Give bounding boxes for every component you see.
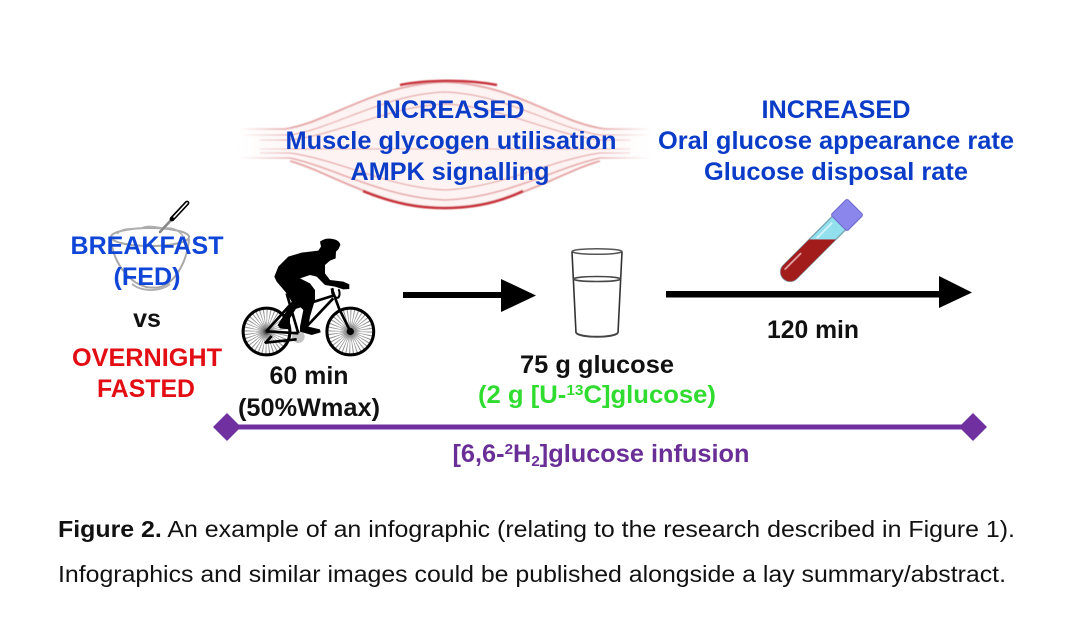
text: overnight fasted: OVERNIGHT (72, 344, 222, 372)
icon: cereal bowl (111, 203, 189, 290)
icon: blood test tube (775, 199, 863, 287)
text: overnight fasted (72, 344, 222, 403)
text: breakfast fed: BREAKFAST (70, 232, 224, 260)
text: infusion label: [6,6- (452, 440, 504, 468)
caption: Figure 2. An example of an infographic (relating to the research described in Figure 1). (58, 516, 1015, 542)
chainring (292, 330, 305, 343)
text: overnight fasted: FASTED (97, 375, 195, 403)
caption: Infographics and similar images could be published alongside a lay summary/abstract. (58, 561, 1006, 587)
rider silhouette (274, 239, 349, 335)
text: 120 min: 120 min (767, 316, 859, 344)
text: glucose dose: 75 g glucose (520, 351, 674, 379)
text: glucose dose: (2 g [U- (478, 381, 564, 409)
front wheel (327, 308, 374, 355)
bike frame (265, 288, 350, 343)
text: infusion label: 2 (531, 453, 540, 470)
text: muscle outcomes: INCREASED (376, 96, 524, 124)
text: cycling duration: (50%Wmax) (238, 394, 380, 422)
text: cycling duration: 60 min (270, 362, 348, 390)
bar: infusion timeline (213, 413, 987, 441)
text: muscle outcomes (286, 96, 616, 186)
text: glucose outcomes: Glucose disposal rate (704, 158, 968, 186)
text: glucose outcomes: INCREASED (762, 96, 910, 124)
text: infusion label: ]glucose infusion (540, 440, 750, 468)
text: glucose dose: C]glucose) (583, 381, 716, 409)
text: glucose dose: 13 (566, 382, 583, 399)
text: muscle outcomes: AMPK signalling (350, 158, 550, 186)
text: cycling duration (238, 362, 380, 422)
text: muscle outcomes: Muscle glycogen utilisation (286, 127, 616, 155)
text: vs: vs (133, 305, 161, 333)
text: breakfast fed (70, 232, 224, 291)
text: breakfast fed: (FED) (114, 263, 180, 291)
text: glucose outcomes: Oral glucose appearance rate (658, 127, 1014, 155)
caption (58, 516, 1015, 587)
icon: glass (572, 249, 622, 337)
text: infusion label: 2 (505, 441, 513, 458)
text: glucose outcomes (658, 96, 1014, 186)
icon: muscle (240, 81, 650, 208)
handlebar (332, 288, 340, 298)
arrow: to glucose drink (403, 279, 536, 312)
text: infusion label: H (513, 440, 531, 468)
icon: cyclist (243, 239, 374, 355)
text: glucose dose (478, 351, 716, 409)
rear wheel (243, 308, 290, 355)
arrow: 120 min timeline (666, 276, 972, 308)
